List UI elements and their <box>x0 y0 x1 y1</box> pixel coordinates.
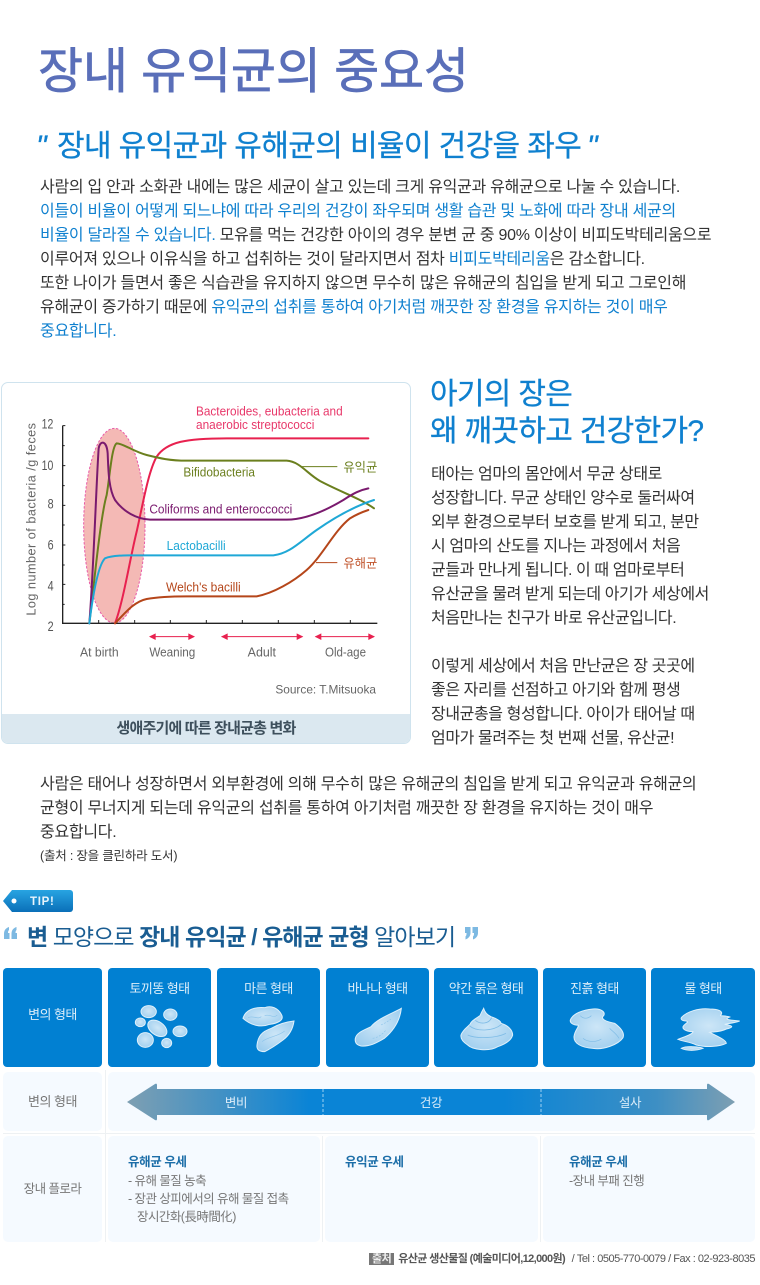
intro text block: 중요합니다. <box>40 323 116 340</box>
intro text block: 이루어져 있으나 이유식을 하고 섭취하는 것이 달라지면서 점차 비피도박테리움은 감소합니다. <box>40 251 645 268</box>
row label: gut flora <box>3 1136 102 1242</box>
panel: water form: 물 형태 <box>684 981 722 996</box>
line chart: log number of bacteria over age: 유해균 <box>343 557 377 571</box>
right text block: 시 엄마의 산도를 지나는 과정에서 처음 <box>431 538 680 555</box>
right text block: 성장합니다. 무균 상태인 양수로 둘러싸여 <box>431 490 695 507</box>
line chart: log number of bacteria over age: Bifidobacteria <box>183 466 256 480</box>
lower text block: 중요합니다. <box>40 824 116 841</box>
panel: flora for diarrhea: -장내 부패 진행 <box>569 1174 644 1188</box>
subtitle quote: " <box>36 130 47 163</box>
panel: rabbit pellet form <box>108 968 211 1067</box>
row label: gut flora: 장내 플로라 <box>24 1182 81 1196</box>
source footer: 출처 유산균 생산물질 (예술미디어,12,000원) / Tel : 0505-770-0079 / Fax : 02-923-8035 <box>372 1253 755 1265</box>
arrow: constipation to diarrhea: 변비 <box>225 1096 247 1110</box>
right text block: 유산균을 물려 받게 되는데 아기가 세상에서 <box>431 586 709 603</box>
panel: dry form <box>217 968 320 1067</box>
heading: why baby gut is clean: 왜 깨끗하고 건강한가? <box>430 414 703 448</box>
right text block: 장내균총을 형성합니다. 아이가 태어날 때 <box>431 706 695 723</box>
panel: slightly soft form: 약간 묽은 형태 <box>449 981 523 996</box>
arrow: constipation to diarrhea: 건강 <box>420 1096 443 1110</box>
title: 장내 유익균의 중요성 <box>38 45 469 99</box>
right text block: 처음만나는 친구가 바로 유산균입니다. <box>431 610 676 627</box>
panel: flora for constipation <box>108 1136 320 1242</box>
row label: stool form <box>3 1072 102 1131</box>
panel: flora for healthy <box>325 1136 538 1242</box>
line chart: log number of bacteria over age: Coliforms and enteroccocci <box>149 503 292 517</box>
icon: opening quote <box>4 927 17 939</box>
line chart: log number of bacteria over age: 8 <box>48 495 54 511</box>
line chart: log number of bacteria over age: 2 <box>48 618 54 634</box>
panel: row header stool form: 변의 형태 <box>28 1007 77 1022</box>
line chart: log number of bacteria over age: Adult <box>248 646 276 660</box>
icon: banana shape <box>354 1007 402 1047</box>
panel: stool spectrum row <box>108 1072 755 1131</box>
chart caption strip <box>2 714 410 743</box>
icon: pellets <box>134 1005 188 1048</box>
icon: dry lumps <box>242 1006 295 1052</box>
right text block: 외부 환경으로부터 보호를 받게 되고, 분만 <box>431 514 699 531</box>
arrow: constipation to diarrhea: 설사 <box>619 1096 642 1110</box>
line chart: log number of bacteria over age: Source: T.Mitsuoka <box>275 683 376 697</box>
line chart: log number of bacteria over age: Weaning <box>149 646 195 660</box>
intro text block: 사람의 입 안과 소화관 내에는 많은 세균이 살고 있는데 크게 유익균과 유해균으로 나눌 수 있습니다. <box>40 179 680 196</box>
line chart: log number of bacteria over age: 4 <box>48 577 54 593</box>
tip tag <box>3 890 73 912</box>
heading: why baby gut is clean <box>430 378 704 448</box>
right text block: 좋은 자리를 선점하고 아기와 함께 평생 <box>431 682 680 699</box>
right text block: 엄마가 물려주는 첫 번째 선물, 유산균! <box>431 730 674 747</box>
row label: stool form: 변의 형태 <box>28 1094 77 1109</box>
right text block: 이렇게 세상에서 처음 만난균은 장 곳곳에 <box>431 658 695 675</box>
right text block: 태아는 엄마의 몸안에서 무균 상태로 <box>431 466 662 483</box>
subtitle quote: " <box>587 130 598 163</box>
icon: mud <box>570 1008 624 1050</box>
panel: mud form <box>543 968 646 1067</box>
heading: why baby gut is clean: 아기의 장은 <box>430 378 572 411</box>
intro text block: 또한 나이가 들면서 좋은 식습관을 유지하지 않으면 무수히 많은 유해균의 침입을 받게 되고 그로인해 <box>40 275 686 292</box>
tip tag: TIP! <box>30 896 55 908</box>
lower text block <box>40 776 696 863</box>
chart caption strip: 생애주기에 따른 장내균총 변화 <box>116 720 296 737</box>
panel: mud form: 진흙 형태 <box>570 981 619 996</box>
line chart: log number of bacteria over age: 10 <box>42 457 53 473</box>
line chart: log number of bacteria over age: 12 <box>42 415 53 431</box>
right text block: 균들과 만나게 됩니다. 이 때 엄마로부터 <box>431 562 684 579</box>
icon: closing quote <box>465 927 478 940</box>
panel: water form <box>651 968 755 1067</box>
arrow: constipation to diarrhea <box>127 1084 735 1120</box>
panel: banana form <box>326 968 429 1067</box>
icon: soft coil <box>460 1007 514 1050</box>
panel: rabbit pellet form: 토끼똥 형태 <box>129 981 190 996</box>
panel: flora for constipation: 유해균 우세 <box>128 1155 187 1169</box>
icon: water <box>676 1008 740 1051</box>
lower text block: 사람은 태어나 성장하면서 외부환경에 의해 무수히 많은 유해균의 침입을 받게 되고 유익균과 유해균의 <box>40 776 696 793</box>
intro text block: 이들이 비율이 어떻게 되느냐에 따라 우리의 건강이 좌우되며 생활 습관 및 노화에 따라 장내 세균의 <box>40 203 676 220</box>
intro text block <box>40 178 711 340</box>
line chart: log number of bacteria over age: 유익균 <box>343 461 377 475</box>
line chart: log number of bacteria over age: Log number of bacteria /g feces <box>24 423 38 616</box>
line chart: log number of bacteria over age: Old-age <box>325 646 366 660</box>
intro text block: 유해균이 증가하기 때문에 유익균의 섭취를 통하여 아기처럼 깨끗한 장 환경을 유지하는 것이 매우 <box>40 299 668 316</box>
panel: banana form: 바나나 형태 <box>347 981 408 996</box>
subtitle quote: 장내 유익균과 유해균의 비율이 건강을 좌우 <box>57 130 581 163</box>
panel: flora for healthy: 유익균 우세 <box>345 1155 404 1169</box>
line chart: log number of bacteria over age: Lactobacilli <box>167 539 226 553</box>
right text block <box>431 466 709 747</box>
panel: flora for constipation: - 장관 상피에서의 유해 물질 접촉 <box>128 1192 289 1206</box>
panel: flora for diarrhea <box>543 1136 755 1242</box>
line chart: log number of bacteria over age: 6 <box>48 536 54 552</box>
tip heading: 변 모양으로 장내 유익균 / 유해균 균형 알아보기 <box>27 924 455 950</box>
panel: flora for constipation: - 유해 물질 농축 <box>128 1174 206 1188</box>
panel: bacteria life-cycle chart <box>1 382 411 744</box>
intro text block: 비율이 달라질 수 있습니다. 모유를 먹는 건강한 아이의 경우 분변 균 중 90% 이상이 비피도박테리움으로 <box>40 227 711 244</box>
line chart: log number of bacteria over age: Bacteroides, eubacteria and <box>196 405 343 419</box>
lower text block: (출처 : 장을 클린하라 도서) <box>40 849 177 863</box>
panel: row header stool form <box>3 968 102 1067</box>
panel: flora for diarrhea: 유해균 우세 <box>569 1155 628 1169</box>
panel: slightly soft form <box>434 968 538 1067</box>
line chart: log number of bacteria over age: At birth <box>80 646 119 660</box>
panel: flora for constipation: 장시간화(長時間化) <box>137 1210 236 1224</box>
panel: dry form: 마른 형태 <box>244 981 293 996</box>
line chart: log number of bacteria over age <box>24 405 378 697</box>
line chart: log number of bacteria over age: Welch's bacilli <box>166 581 241 595</box>
line chart: log number of bacteria over age: anaerobic streptococci <box>196 418 314 432</box>
lower text block: 균형이 무너지게 되는데 유익균의 섭취를 통하여 아기처럼 깨끗한 장 환경을 유지하는 것이 매우 <box>40 800 653 817</box>
